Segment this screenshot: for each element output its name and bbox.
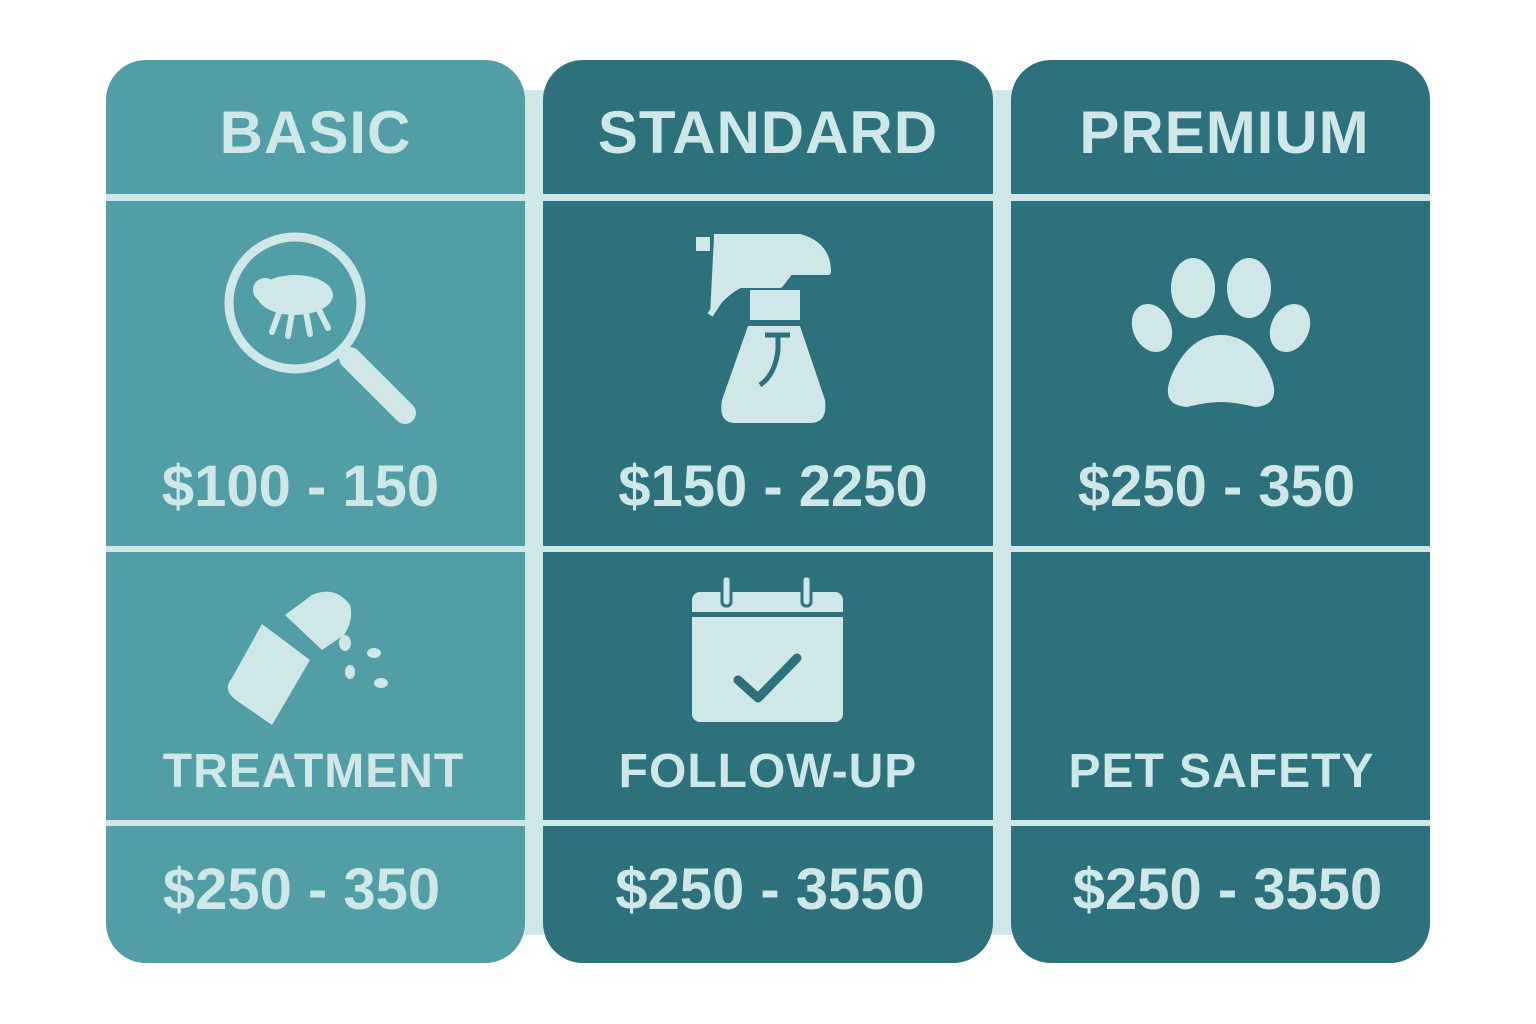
panel: standard <box>543 60 993 963</box>
icon: paw <box>1132 258 1310 407</box>
price: premium row 4: $250 - 3550 <box>1073 857 1382 922</box>
label: pet safety: PET SAFETY <box>1068 745 1375 798</box>
label: follow-up: FOLLOW-UP <box>619 745 917 798</box>
icon: calendar with check <box>692 578 843 722</box>
price: standard row 2: $150 - 2250 <box>618 454 928 519</box>
heading: basic: BASIC <box>220 99 411 166</box>
price: standard row 4: $250 - 3550 <box>615 857 925 922</box>
icon: magnifier with flea <box>224 232 416 424</box>
panel: premium <box>1011 60 1430 963</box>
icon: spray bottle <box>696 234 831 423</box>
label: treatment: TREATMENT <box>163 745 464 798</box>
price: basic row 2: $100 - 150 <box>162 454 439 519</box>
panel: basic <box>106 60 525 963</box>
heading: standard: STANDARD <box>598 99 938 166</box>
price: basic row 4: $250 - 350 <box>163 857 440 922</box>
heading: premium: PREMIUM <box>1079 99 1370 166</box>
price: premium row 2: $250 - 350 <box>1078 454 1355 519</box>
icon: shaker <box>228 592 388 725</box>
